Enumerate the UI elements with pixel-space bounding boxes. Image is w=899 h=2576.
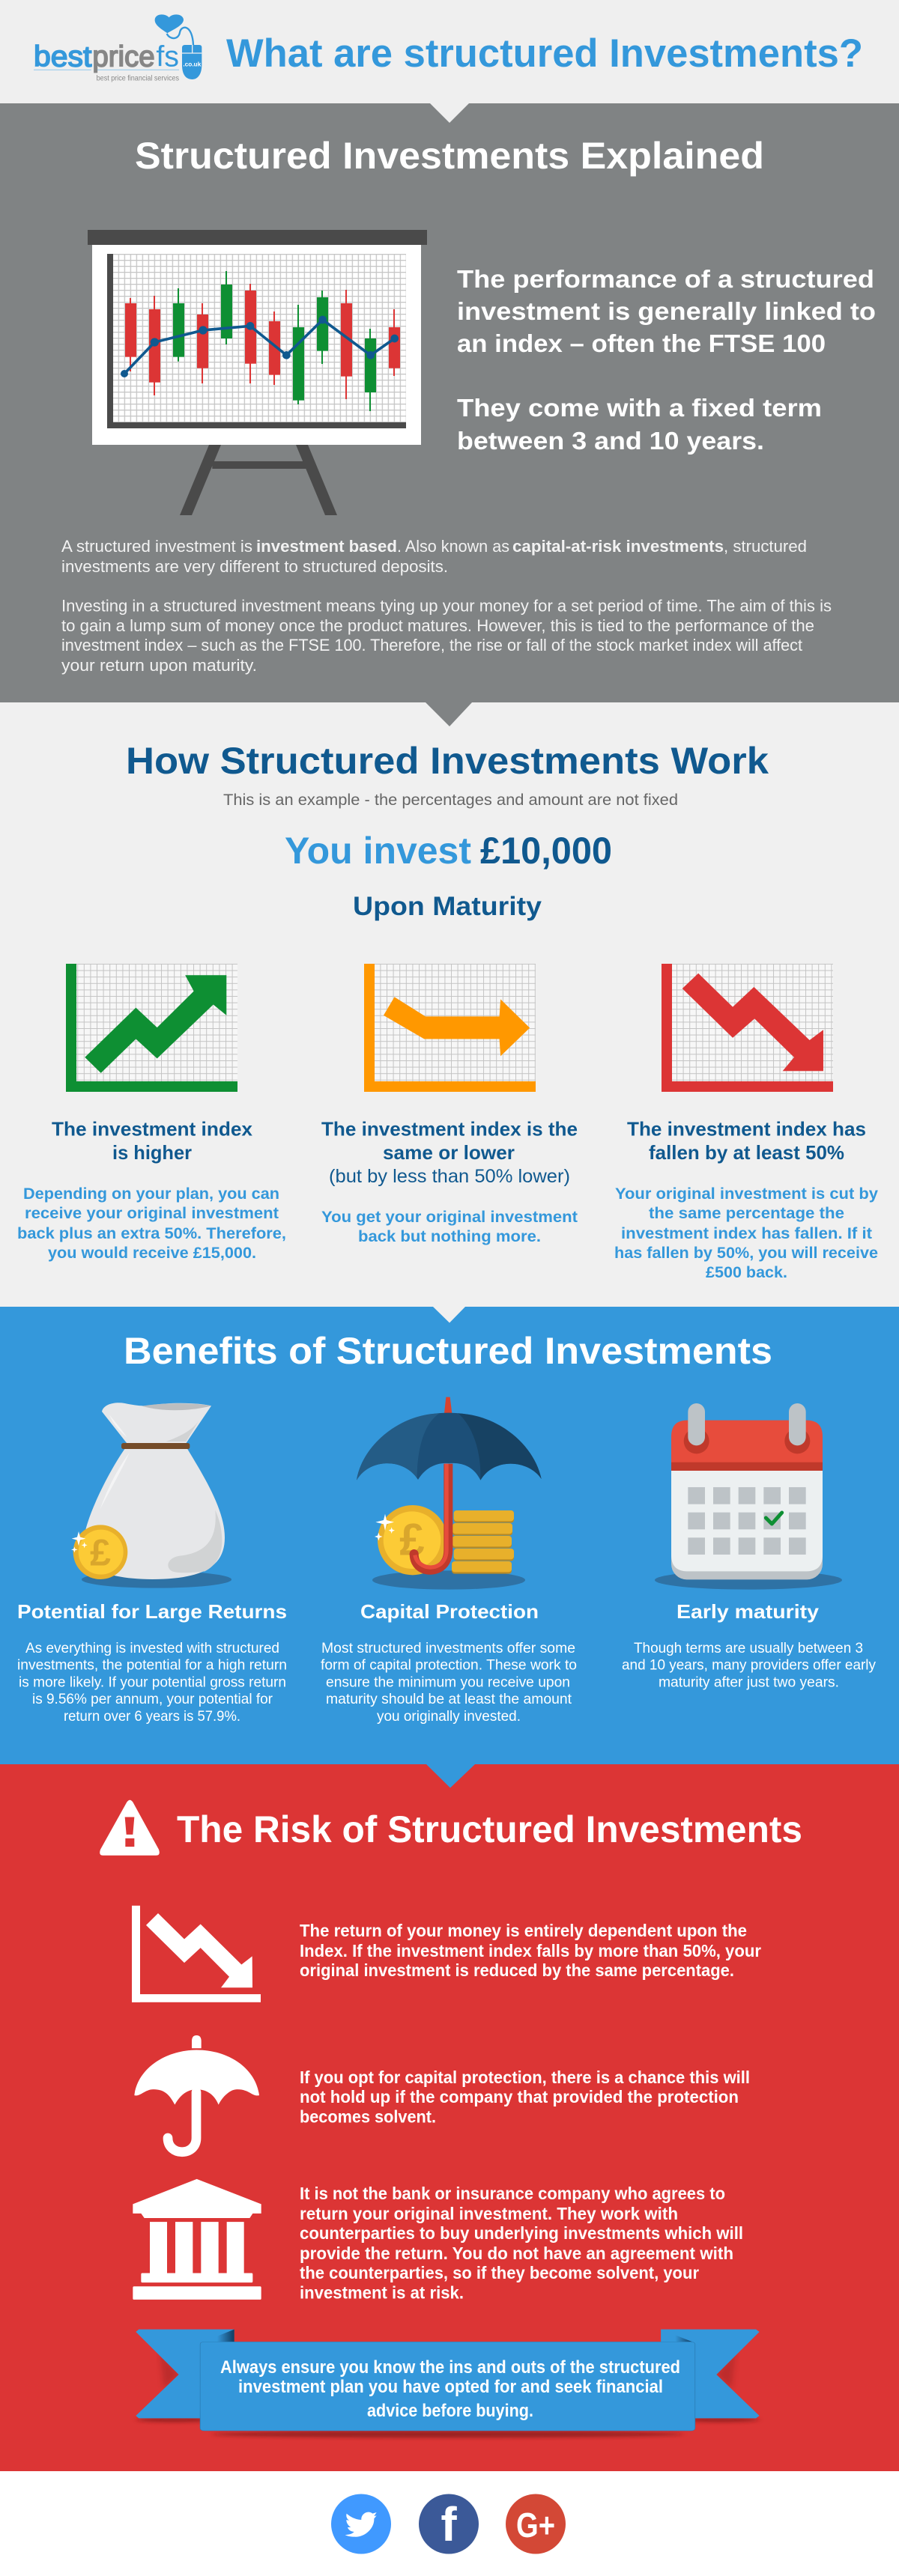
caption: is higher: is higher bbox=[112, 1141, 192, 1164]
result text: has fallen by 50%, you will receive bbox=[614, 1244, 878, 1262]
explanatory paragraphs: investment index – such as the FTSE 100. Therefore, the rise or fall of the stock market index will affect bbox=[61, 636, 802, 654]
caption: same or lower: The investment index is the bbox=[321, 1117, 578, 1140]
result text: Depending on your plan, you can bbox=[23, 1185, 279, 1203]
logo: bestpricefs: best bbox=[34, 40, 92, 73]
risk text 3: return your original investment. They work with bbox=[300, 2204, 678, 2223]
key facts text: between 3 and 10 years. bbox=[457, 427, 764, 455]
icon: calendar bbox=[655, 1403, 842, 1590]
risk text 1: The return of your money is entirely dependent upon the bbox=[300, 1921, 747, 1940]
result text: Your original investment is cut by bbox=[615, 1185, 878, 1203]
caption: same or lower: (but by less than 50% lower) bbox=[329, 1166, 570, 1187]
text: potential for large returns: investments, the potential for a high return bbox=[17, 1656, 287, 1673]
logo: bestpricefs: best price financial services bbox=[97, 74, 179, 82]
risk text 3: counterparties to buy underlying investments which will bbox=[300, 2223, 743, 2243]
icon: orange flat chart bbox=[364, 964, 536, 1092]
key facts text: They come with a fixed term bbox=[457, 394, 822, 422]
heading: risk: The Risk of Structured Investments bbox=[177, 1808, 802, 1850]
risk text 1: Index. If the investment index falls by more than 50%, your bbox=[300, 1941, 761, 1960]
risk text 1: original investment is reduced by the same percentage. bbox=[300, 1960, 734, 1980]
banner: always ensure bbox=[136, 2330, 760, 2437]
icon: twitter bbox=[331, 2494, 391, 2554]
you invest amount: £10,000 bbox=[480, 830, 612, 872]
icon: money bag: £ bbox=[90, 1532, 111, 1574]
banner: always ensure: Always ensure you know the ins and outs of the structured bbox=[220, 2357, 680, 2378]
text: capital protection: ensure the minimum you receive upon bbox=[326, 1674, 570, 1691]
logo: bestpricefs: .co.uk bbox=[183, 60, 202, 67]
result text: receive your original investment bbox=[25, 1204, 279, 1222]
icon: green rising chart bbox=[66, 964, 237, 1092]
heading: explained: Structured Investments Explained bbox=[135, 135, 764, 177]
banner: always ensure: advice before buying. bbox=[367, 2401, 533, 2421]
icon: umbrella over coins: £ bbox=[399, 1515, 425, 1565]
result text: the same percentage the bbox=[649, 1204, 844, 1222]
risk text 2: becomes solvent. bbox=[300, 2107, 436, 2127]
explanatory paragraphs: investment based bbox=[256, 537, 397, 556]
result text: back plus an extra 50%. Therefore, bbox=[17, 1224, 286, 1242]
you invest amount bbox=[285, 830, 612, 872]
text: early maturity bbox=[622, 1600, 876, 1691]
result text: you would receive £15,000. bbox=[48, 1244, 256, 1262]
panel: benefits bbox=[0, 1307, 899, 1764]
panel: structured investments explained bbox=[0, 103, 899, 702]
note: example: This is an example - the percentages and amount are not fixed bbox=[223, 792, 678, 809]
header panel bbox=[0, 0, 899, 103]
caption: is higher: The investment index bbox=[52, 1117, 253, 1140]
explanatory paragraphs: A structured investment is bbox=[61, 537, 252, 556]
text: early maturity: and 10 years, many providers offer early bbox=[622, 1656, 876, 1673]
text: capital protection: Capital Protection bbox=[360, 1600, 539, 1623]
result text bbox=[17, 1185, 286, 1262]
result text: You get your original investment bbox=[321, 1208, 578, 1226]
icon: falling chart bbox=[132, 1906, 261, 2002]
footer: social icons bbox=[0, 2471, 899, 2576]
icon: bank bbox=[133, 2179, 261, 2300]
panel: how structured investments work bbox=[0, 702, 899, 1307]
text: potential for large returns: As everything is invested with structured bbox=[25, 1640, 279, 1656]
explanatory paragraphs bbox=[61, 537, 832, 675]
explanatory paragraphs: . Also known as bbox=[397, 537, 509, 556]
result text bbox=[321, 1208, 578, 1245]
explanatory paragraphs: investments are very different to structured deposits. bbox=[61, 557, 448, 576]
icon: umbrella bbox=[134, 2035, 259, 2152]
icon: facebook bbox=[419, 2494, 479, 2554]
risk text 2: If you opt for capital protection, there is a chance this will bbox=[300, 2068, 750, 2087]
text: potential for large returns bbox=[17, 1600, 287, 1725]
icon: umbrella over coins bbox=[357, 1397, 542, 1590]
text: capital protection bbox=[321, 1600, 577, 1725]
column: index higher bbox=[17, 964, 286, 1262]
text: capital protection: Most structured investments offer some bbox=[321, 1640, 575, 1656]
text: potential for large returns: return over 6 years is 57.9%. bbox=[64, 1708, 240, 1725]
column: index fallen bbox=[614, 964, 878, 1281]
risk text 2: not hold up if the company that provided the protection bbox=[300, 2087, 739, 2106]
heading: benefits: Benefits of Structured Investments bbox=[124, 1330, 772, 1372]
result text: investment index has fallen. If it bbox=[621, 1224, 872, 1242]
logo: bestpricefs: fs bbox=[156, 40, 179, 73]
text: potential for large returns: is more likely. If your potential gross return bbox=[19, 1674, 286, 1691]
icon: red falling chart bbox=[662, 964, 833, 1092]
text: early maturity: maturity after just two years. bbox=[659, 1674, 839, 1691]
upon maturity: Upon Maturity bbox=[353, 892, 542, 921]
text: capital protection: maturity should be at least the amount bbox=[326, 1691, 572, 1707]
caption: fallen by at least 50%: The investment index has bbox=[627, 1117, 866, 1140]
logo: bestpricefs bbox=[34, 14, 202, 82]
risk text 3: It is not the bank or insurance company who agrees to bbox=[300, 2184, 725, 2203]
key facts text bbox=[457, 265, 876, 455]
text: early maturity: Though terms are usually between 3 bbox=[634, 1640, 863, 1656]
risk text 1 bbox=[300, 1921, 761, 1980]
result text: back but nothing more. bbox=[358, 1227, 541, 1245]
logo: bestpricefs: price bbox=[92, 40, 155, 73]
risk text 3: provide the return. You do not have an agreement with bbox=[300, 2244, 733, 2263]
text: early maturity: Early maturity bbox=[676, 1600, 820, 1623]
text: potential for large returns: is 9.56% per annum, your potential for bbox=[32, 1691, 273, 1707]
explanatory paragraphs: capital-at-risk investments bbox=[512, 537, 724, 556]
icon: facebook: f bbox=[441, 2497, 457, 2551]
you invest amount: You invest bbox=[285, 830, 471, 872]
key facts text: investment is generally linked to bbox=[457, 297, 876, 325]
text: potential for large returns: Potential for Large Returns bbox=[17, 1600, 287, 1623]
risk text 3: investment is at risk. bbox=[300, 2282, 464, 2302]
caption: fallen by at least 50%: fallen by at least 50% bbox=[649, 1141, 844, 1164]
text: capital protection: you originally invested. bbox=[377, 1708, 521, 1725]
key facts text: an index – often the FTSE 100 bbox=[457, 329, 826, 357]
icon: warning triangle bbox=[100, 1800, 160, 1856]
risk text 3: the counterparties, so if they become solvent, your bbox=[300, 2263, 699, 2282]
caption: same or lower: same or lower bbox=[383, 1141, 515, 1164]
explanatory paragraphs: Investing in a structured investment means tying up your money for a set period of time. The aim of this is bbox=[61, 596, 832, 616]
banner: always ensure: investment plan you have opted for and seek financial bbox=[238, 2377, 663, 2397]
column: index same or lower bbox=[321, 964, 578, 1245]
risk text 2 bbox=[300, 2068, 750, 2127]
result text: £500 back. bbox=[706, 1263, 787, 1281]
risk text 3 bbox=[300, 2184, 743, 2302]
explanatory paragraphs: to gain a lump sum of money once the product matures. However, this is tied to the performance of the bbox=[61, 616, 814, 635]
text: capital protection: form of capital protection. These work to bbox=[321, 1656, 577, 1673]
icon: presentation board with candlestick chart bbox=[88, 230, 427, 515]
page title: What are structured Investments? bbox=[226, 31, 863, 76]
explanatory paragraphs: your return upon maturity. bbox=[61, 656, 257, 675]
icon: google plus bbox=[506, 2494, 566, 2554]
caption: same or lower bbox=[321, 1117, 578, 1187]
key facts text: The performance of a structured bbox=[457, 265, 874, 293]
panel: risks bbox=[0, 1764, 899, 2471]
caption: fallen by at least 50% bbox=[627, 1117, 866, 1164]
heading: how it works: How Structured Investments Work bbox=[126, 740, 769, 782]
result text bbox=[614, 1185, 878, 1281]
explanatory paragraphs: , structured bbox=[724, 537, 807, 556]
icon: money bag bbox=[71, 1403, 231, 1588]
icon: google plus: G+ bbox=[516, 2506, 555, 2545]
caption: is higher bbox=[52, 1117, 253, 1164]
